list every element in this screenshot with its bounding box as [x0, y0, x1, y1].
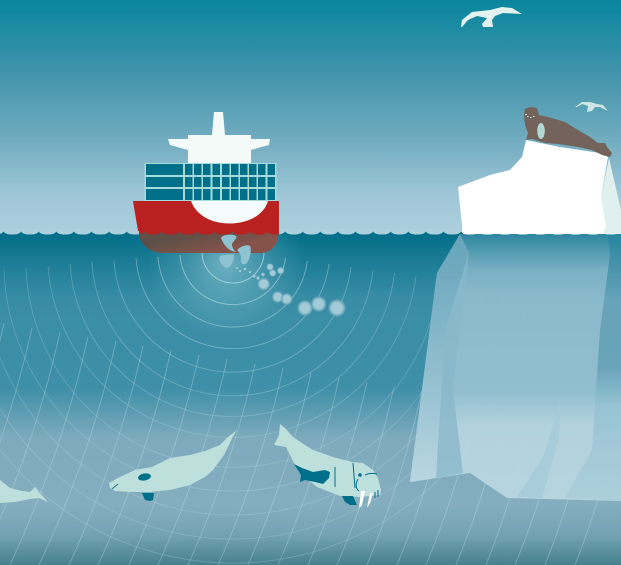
walrus eye: [358, 473, 362, 477]
iceberg white face: [458, 140, 608, 234]
noise glow around propeller: [148, 235, 304, 340]
iceberg inner dark facet: [436, 253, 469, 478]
walrus dark marking: [294, 464, 330, 484]
sound waves: concentric arcs: [0, 252, 527, 563]
beluga flipper: [142, 493, 154, 501]
propeller: [219, 235, 251, 268]
beluga whale: [109, 430, 237, 501]
container ship: [133, 112, 279, 268]
walrus body: [274, 424, 381, 497]
sound waves: radiating curved lines: [0, 323, 618, 565]
iceberg below water: [410, 234, 621, 501]
gull: large: [461, 7, 522, 27]
seal on iceberg: [524, 107, 612, 157]
waves over sky: [0, 229, 621, 237]
iceberg above water: [458, 140, 621, 234]
bubbles from propeller cavitation: [236, 263, 346, 317]
container stack: [144, 163, 276, 201]
ship superstructure: [168, 112, 270, 164]
sea: [0, 231, 621, 565]
seal face: [525, 114, 534, 118]
red hull: [133, 201, 279, 231]
white bow wave on hull: [191, 201, 268, 224]
iceberg right band: [565, 234, 621, 501]
walrus flipper: [342, 496, 357, 505]
walrus tusks: [359, 491, 373, 508]
waves over iceberg: [462, 229, 607, 237]
walrus face and body lines: [335, 463, 378, 498]
beluga marking: [137, 472, 152, 482]
beluga body: [109, 430, 237, 492]
sky: [0, 0, 621, 234]
gull: small: [575, 102, 608, 112]
iceberg side face: [601, 158, 621, 234]
walrus: [274, 424, 381, 508]
waves over iceberg side: [604, 229, 621, 237]
whale at left edge: [0, 480, 48, 503]
waves along the waterline: [0, 229, 621, 237]
iceberg main mass: [410, 234, 621, 501]
beluga mouth: [112, 484, 118, 489]
red waves on hull: [139, 229, 279, 237]
iceberg lower facet: [517, 403, 560, 498]
iceberg left facet: [410, 234, 469, 482]
underwater hull: [139, 230, 279, 253]
seal flipper: [537, 123, 545, 139]
seal body: [524, 107, 612, 157]
